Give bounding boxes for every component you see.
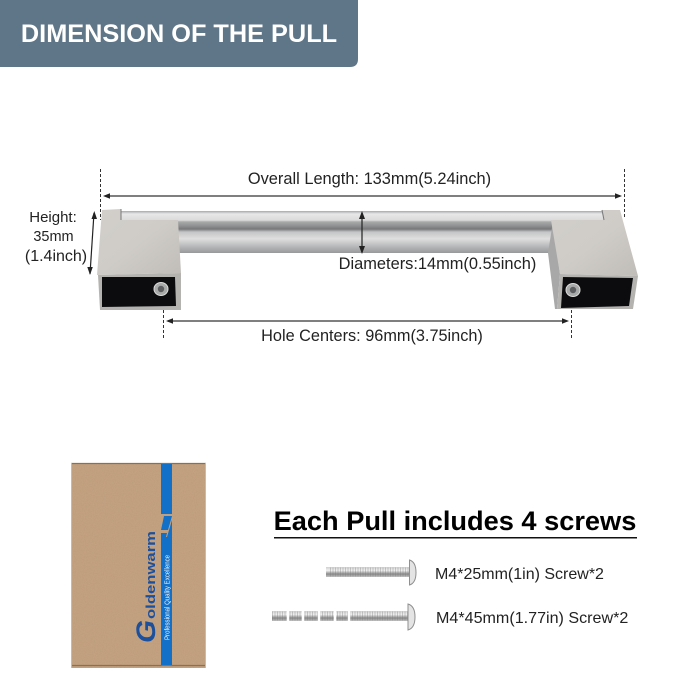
left mounting block xyxy=(97,209,181,310)
blue stripe xyxy=(161,464,172,665)
brand logo: G xyxy=(131,620,161,643)
dimension: height: 35mm xyxy=(33,229,74,245)
header banner xyxy=(0,0,358,67)
pull handle photo xyxy=(97,209,638,310)
dimension: height: Height: xyxy=(29,209,77,226)
dimension: hole centers: Hole Centers: 96mm(3.75inch) xyxy=(261,327,483,345)
brand logo: oldenwarm xyxy=(143,531,158,619)
dimension: overall length xyxy=(100,169,624,220)
dimension: height: (1.4inch) xyxy=(25,248,87,265)
heading: screws: Each Pull includes 4 screws xyxy=(274,505,636,536)
short screw xyxy=(326,560,416,585)
long screw label: M4*45mm(1.77in) Screw*2 xyxy=(436,609,628,627)
dimension: diameter xyxy=(339,211,536,273)
short screw label: M4*25mm(1in) Screw*2 xyxy=(435,566,604,583)
dimension: diameter: Diameters:14mm(0.55inch) xyxy=(339,255,536,273)
long screw xyxy=(272,604,415,630)
brand logo xyxy=(131,531,161,643)
tagline: Professional Quality Excellence xyxy=(162,555,172,640)
header banner: DIMENSION OF THE PULL xyxy=(21,20,337,48)
dimension: height xyxy=(25,209,97,275)
handle bar xyxy=(120,211,604,253)
dimension: hole centers xyxy=(164,310,572,345)
right mounting block xyxy=(548,210,638,309)
product box xyxy=(71,463,206,668)
dimension: overall length: Overall Length: 133mm(5.24inch) xyxy=(248,170,491,188)
